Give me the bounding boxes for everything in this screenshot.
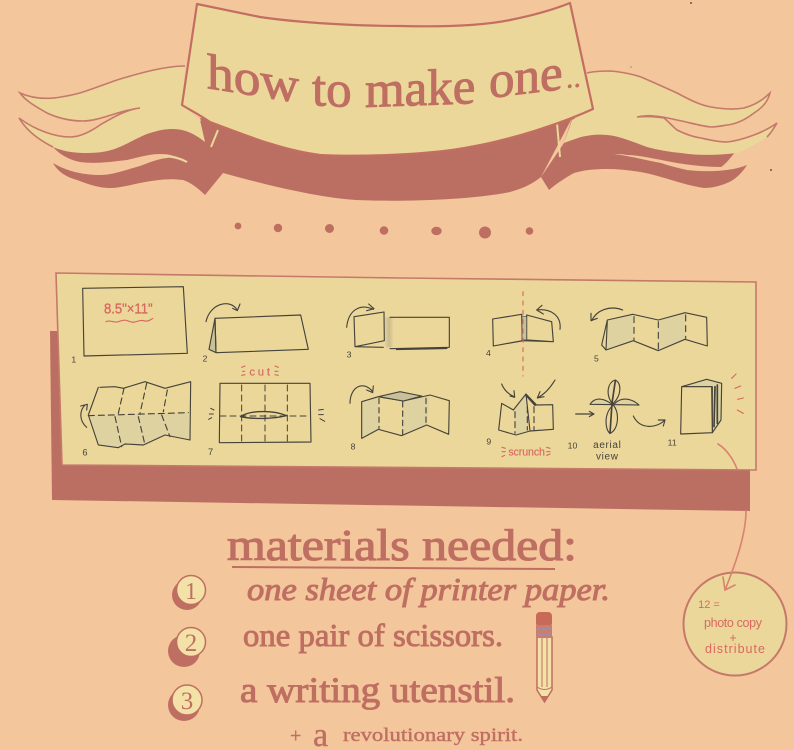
step 12 circle: 12 =	[698, 599, 720, 611]
item 1	[172, 571, 610, 610]
step 5: accordion: 5	[594, 353, 599, 363]
banner left tail outline	[19, 66, 185, 147]
step 12 circle	[684, 572, 786, 676]
specks	[630, 2, 772, 171]
step 11: finished zine	[668, 374, 743, 448]
step 7: cut: cut	[249, 366, 271, 378]
steps 1 to 3, 6 to 8	[71, 287, 449, 458]
banner title text: make	[365, 59, 475, 119]
step 9: scrunch: scrunch	[508, 446, 545, 458]
steps 4, 5, 9 to 11	[486, 292, 743, 462]
banner title text: how	[207, 43, 300, 114]
step 8: open fold	[350, 386, 449, 451]
closing note: +	[290, 725, 301, 747]
step 4: fold ends in: 4	[486, 348, 491, 358]
step 6: unfolded sheet: 6	[82, 448, 88, 458]
materials heading: materials needed:	[227, 521, 577, 570]
banner title text	[207, 43, 581, 119]
step 1: sheet: 8.5"×11"	[104, 301, 153, 317]
step 10: aerial view: aerial	[593, 440, 622, 451]
closing note: revolutionary spirit.	[343, 725, 523, 746]
step 2: fold in half	[203, 304, 308, 364]
banner left tail	[19, 66, 205, 153]
step 9: scrunch	[486, 380, 555, 458]
number 3 badge	[168, 685, 202, 721]
step 7: cut: 7	[208, 447, 213, 457]
banner main shadow	[200, 110, 572, 201]
instructions panel	[50, 273, 756, 511]
item 2	[168, 617, 503, 667]
banner right tail	[564, 71, 777, 155]
step 7: cut	[208, 366, 325, 457]
step 10: aerial view: view	[596, 451, 619, 462]
banner face	[182, 3, 593, 156]
step 4: fold ends in	[486, 292, 560, 376]
banner title text: one	[489, 44, 563, 110]
step 3: fold again	[347, 304, 449, 359]
panel shadow	[50, 331, 750, 511]
step 12 circle: distribute	[705, 642, 765, 656]
title banner	[19, 3, 777, 201]
step 10: aerial view: 10	[568, 440, 577, 450]
dotted divider	[235, 223, 533, 238]
step 5: accordion	[591, 308, 707, 363]
step 3: fold again: 3	[347, 349, 352, 359]
number 3 badge: 3	[181, 688, 193, 715]
item 2 text: one pair of scissors.	[243, 617, 503, 653]
step 9: scrunch: 9	[486, 437, 491, 447]
number 1 badge	[172, 576, 206, 610]
banner left tail shadow	[53, 120, 223, 195]
step 1: sheet: 1	[71, 354, 76, 364]
item 1 text: one sheet of printer paper.	[247, 571, 610, 607]
banner fold slivers	[163, 123, 560, 162]
banner title text: to	[312, 61, 352, 119]
item 3 text: a writing utenstil.	[240, 670, 515, 710]
banner title text: ..	[566, 59, 581, 95]
step 8: open fold: 8	[351, 441, 356, 451]
number 2 badge: 2	[185, 630, 197, 657]
panel sheet	[56, 273, 756, 470]
icon: pencil	[536, 612, 552, 702]
banner right tail outline	[587, 71, 777, 142]
step 6: unfolded sheet	[81, 382, 191, 458]
step 12 circle: photo copy	[704, 616, 763, 630]
step 11: finished zine: 11	[668, 438, 677, 448]
step 10: aerial view	[568, 380, 665, 462]
item 3	[168, 670, 515, 721]
number 2 badge	[168, 628, 206, 667]
banner right tail shadow	[541, 118, 747, 190]
step 2: fold in half: 2	[203, 354, 208, 364]
arrow to step 12	[718, 444, 746, 590]
step 12 circle: +	[729, 631, 737, 645]
number 1 badge: 1	[185, 579, 197, 605]
closing note	[290, 717, 523, 750]
step 1: sheet	[71, 287, 187, 364]
